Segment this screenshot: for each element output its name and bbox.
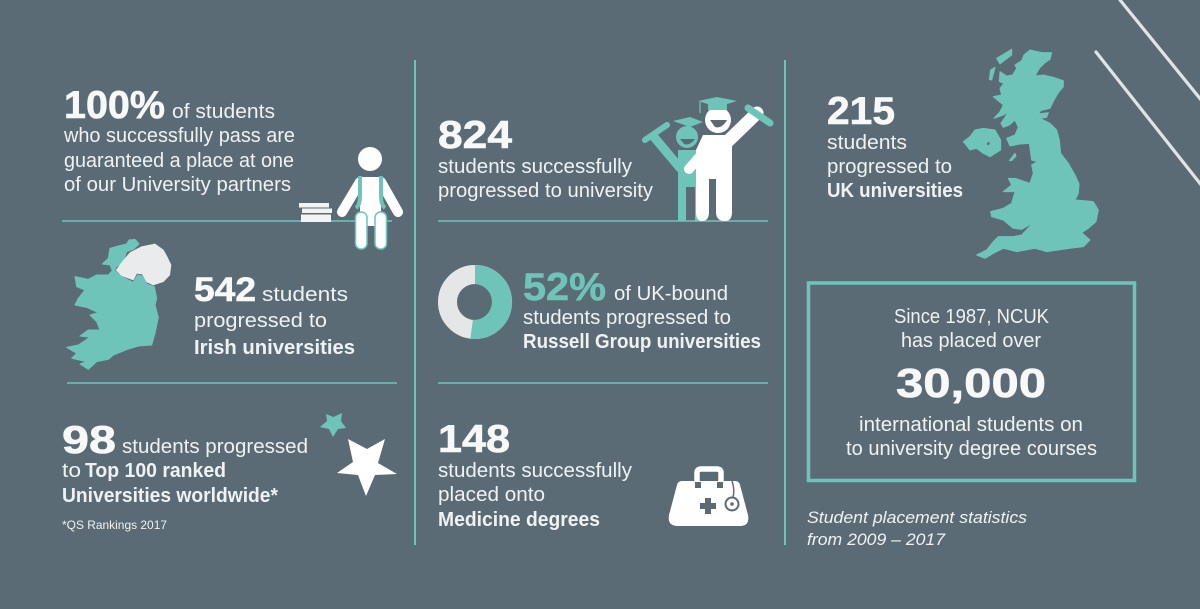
text block: Medicine degrees: Medicine degrees: [438, 509, 600, 531]
text block: Russell Group: 52%: [523, 266, 606, 309]
text block: Russell Group: students progressed to: [523, 307, 731, 329]
text block: 100% guaranteed: 100%: [64, 84, 165, 127]
text block: UK universities: progressed to: [827, 156, 952, 178]
text block: Irish universities: [194, 271, 355, 359]
text block: Top 100 ranked: Universities worldwide*: [62, 485, 278, 507]
donut chart: 52%: [448, 265, 512, 339]
text block: 100% guaranteed: of students: [172, 101, 275, 123]
caption: statistics period: Student placement statistics: [807, 508, 1028, 527]
icon: graduates: [645, 97, 770, 221]
callout box: 30,000 students: [808, 283, 1134, 480]
text block: Russell Group: [523, 266, 761, 353]
text block: Irish universities: 542: [194, 271, 256, 309]
map: United Kingdom: [963, 49, 1098, 258]
text block: Medicine degrees: [438, 418, 632, 531]
text block: 824 students: 824: [438, 114, 512, 157]
caption: statistics period: from 2009 – 2017: [807, 530, 946, 549]
text block: UK universities: 215: [827, 90, 895, 133]
icon: student sitting with books: [299, 147, 398, 249]
callout box: 30,000 students: international students on: [859, 414, 1083, 436]
text block: Top 100 ranked: 98: [62, 419, 116, 462]
text block: Top 100 ranked: *QS Rankings 2017: [62, 518, 167, 532]
text block: Medicine degrees: students successfully: [438, 460, 632, 482]
text block: Irish universities: Irish universities: [194, 337, 355, 359]
text block: 100% guaranteed: of our University partners: [64, 174, 291, 196]
text block: UK universities: [827, 90, 963, 202]
text block: Irish universities: students: [262, 284, 348, 306]
text block: 824 students: [438, 114, 653, 202]
text block: 824 students: students successfully: [438, 156, 632, 178]
icon: medical bag: [669, 469, 748, 526]
icon: stars: [320, 413, 397, 496]
text block: Irish universities: progressed to: [194, 310, 327, 332]
text block: Top 100 ranked: to: [62, 460, 81, 482]
text block: Medicine degrees: placed onto: [438, 484, 545, 506]
caption: statistics period: [807, 508, 1028, 549]
decorative diagonal lines: [1096, 0, 1200, 186]
text block: 100% guaranteed: guaranteed a place at one: [64, 150, 294, 172]
text block: Medicine degrees: 148: [438, 418, 510, 461]
text block: Top 100 ranked: [62, 419, 308, 532]
callout box: 30,000 students: Since 1987, NCUK: [894, 306, 1050, 328]
callout box: 30,000 students: 30,000: [896, 360, 1046, 406]
text block: Russell Group: Russell Group universities: [523, 331, 761, 353]
callout box: 30,000 students: has placed over: [901, 330, 1041, 352]
text block: 100% guaranteed: who successfully pass are: [63, 125, 295, 147]
text block: Russell Group: of UK-bound: [614, 283, 728, 305]
text block: UK universities: students: [827, 132, 907, 154]
map: Ireland: [67, 239, 171, 369]
text block: UK universities: UK universities: [827, 180, 963, 202]
callout box: 30,000 students: to university degree courses: [846, 438, 1097, 460]
text block: Top 100 ranked: students progressed: [122, 436, 308, 458]
text block: 824 students: progressed to university: [438, 180, 653, 202]
text block: 100% guaranteed: [63, 84, 295, 196]
text block: Top 100 ranked: Top 100 ranked: [85, 460, 226, 482]
